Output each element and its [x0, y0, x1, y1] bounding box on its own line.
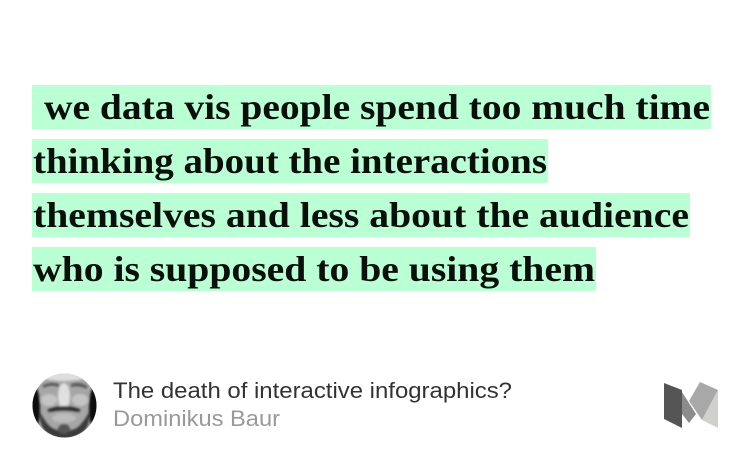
- quote lines: who is supposed to be using them: [33, 249, 595, 289]
- quote lines: we data vis people spend too much time: [44, 87, 710, 127]
- quote card: [32, 85, 718, 438]
- quote highlighted text: [32, 85, 711, 291]
- highlight bands: [32, 85, 711, 291]
- quote lines: themselves and less about the audience: [33, 195, 689, 235]
- icon: medium logo: [664, 382, 718, 428]
- quote lines: thinking about the interactions: [33, 141, 547, 181]
- author name: Dominikus Baur: [113, 406, 281, 431]
- author avatar: [32, 374, 96, 438]
- article title: The death of interactive infographics?: [113, 378, 512, 403]
- quote lines: [33, 87, 710, 289]
